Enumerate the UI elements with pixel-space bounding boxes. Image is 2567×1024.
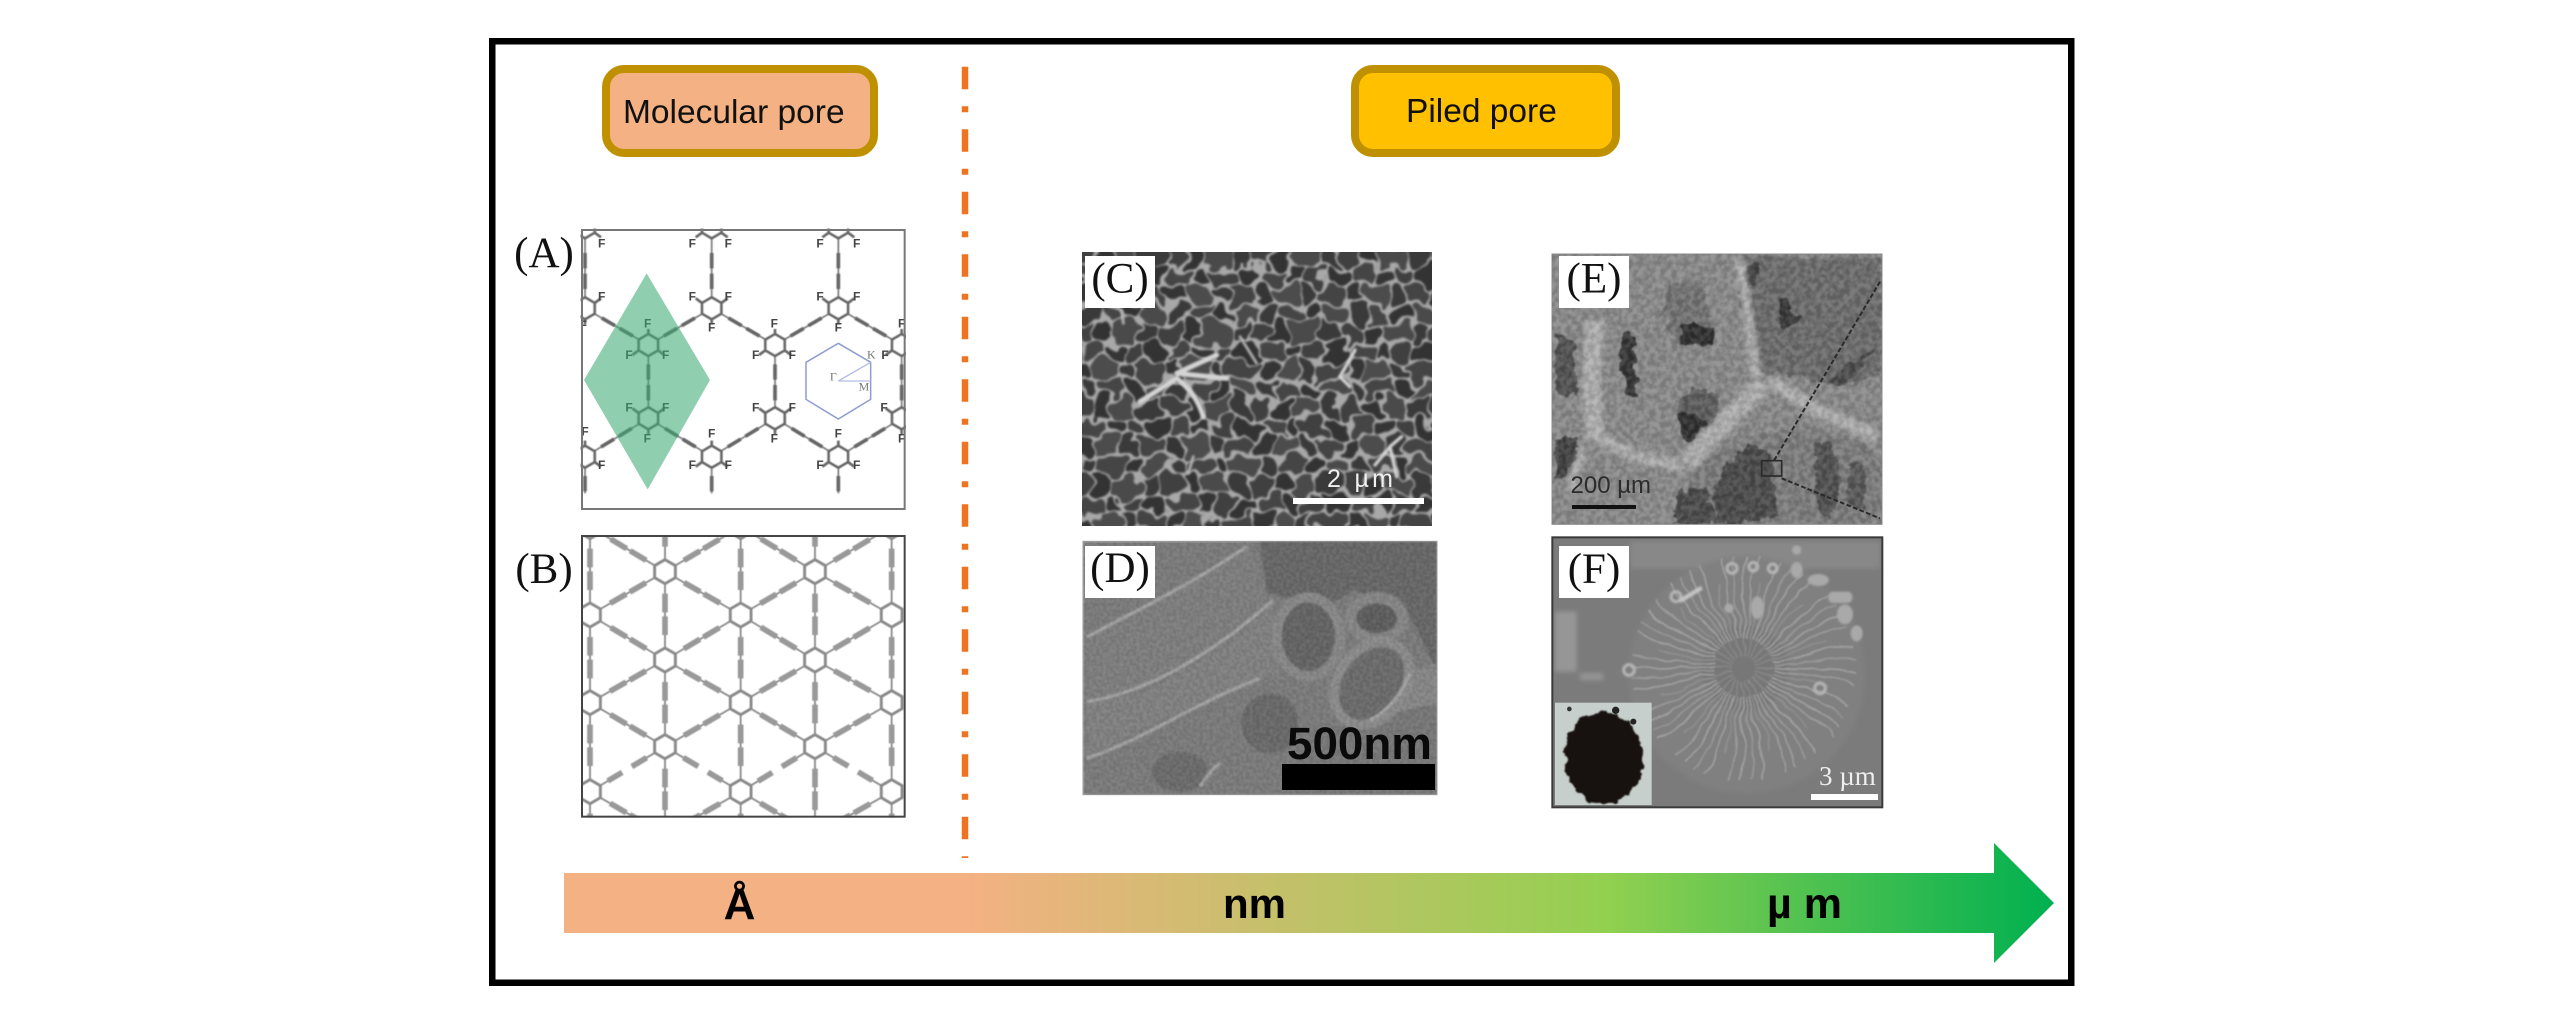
label: µm: µ m xyxy=(1767,880,1842,928)
dash-dot divider xyxy=(962,67,968,858)
heading: Molecular pore: Molecular pore xyxy=(623,94,845,131)
label (A): (A) xyxy=(514,230,574,277)
fin tips xyxy=(1624,545,1863,694)
tube highlights xyxy=(1087,547,1410,787)
panel B: triangular framework xyxy=(581,535,906,818)
label (E): (E) xyxy=(1567,256,1621,303)
label: angstrom: Å xyxy=(724,880,755,929)
light ridges xyxy=(1570,260,1877,493)
Brillouin zone hexagon: K xyxy=(867,347,876,361)
lattice bonds xyxy=(585,228,902,493)
label: nm: nm xyxy=(1223,880,1286,927)
spiral fins xyxy=(1630,556,1856,781)
heading: Molecular pore xyxy=(606,69,874,153)
scale bar 500nm xyxy=(1282,718,1435,790)
dashed zoom lines xyxy=(1762,282,1880,518)
label (C): (C) xyxy=(1091,256,1149,302)
framework bonds xyxy=(586,537,895,818)
scale bar 2 µm xyxy=(1293,465,1424,504)
heading: Piled pore xyxy=(1355,69,1616,153)
scale bar 3 µm xyxy=(1811,761,1878,800)
panel E: macroporous SEM xyxy=(1552,254,1882,524)
scale bar 2 µm: 2 µm xyxy=(1327,465,1393,493)
Brillouin zone hexagon: Γ xyxy=(830,370,837,384)
fluorine atoms: FFFFFFFFFFFFFFFFFFFFFFFFFFFFFFFFFFFFF xyxy=(580,236,905,472)
label (D): (D) xyxy=(1090,545,1150,592)
label (F): (F) xyxy=(1568,546,1620,593)
scale arrow xyxy=(564,843,2054,963)
heading: Piled pore: Piled pore xyxy=(1406,93,1557,130)
panel D: tube SEM xyxy=(1083,542,1437,794)
scale bar 200 µm: 200 µm xyxy=(1570,472,1651,499)
green unit cell diamond xyxy=(584,273,710,489)
scale bar 500nm: 500nm xyxy=(1287,718,1432,769)
panel F: spiral particle SEM xyxy=(1552,537,1882,807)
panel A: fluorinated lattice xyxy=(580,228,906,510)
label (F) xyxy=(1559,546,1629,598)
outer frame xyxy=(492,41,2071,983)
inset: black particle xyxy=(1555,703,1652,805)
panel C: porous network SEM xyxy=(1082,252,1432,526)
Brillouin zone hexagon: M xyxy=(859,380,870,394)
label (B): (B) xyxy=(515,546,573,593)
Brillouin zone hexagon xyxy=(806,343,876,419)
bright ridges xyxy=(1122,310,1402,477)
benzene rings xyxy=(580,228,906,470)
framework rings xyxy=(580,515,902,804)
scale bar 3 µm: 3 µm xyxy=(1819,761,1876,791)
